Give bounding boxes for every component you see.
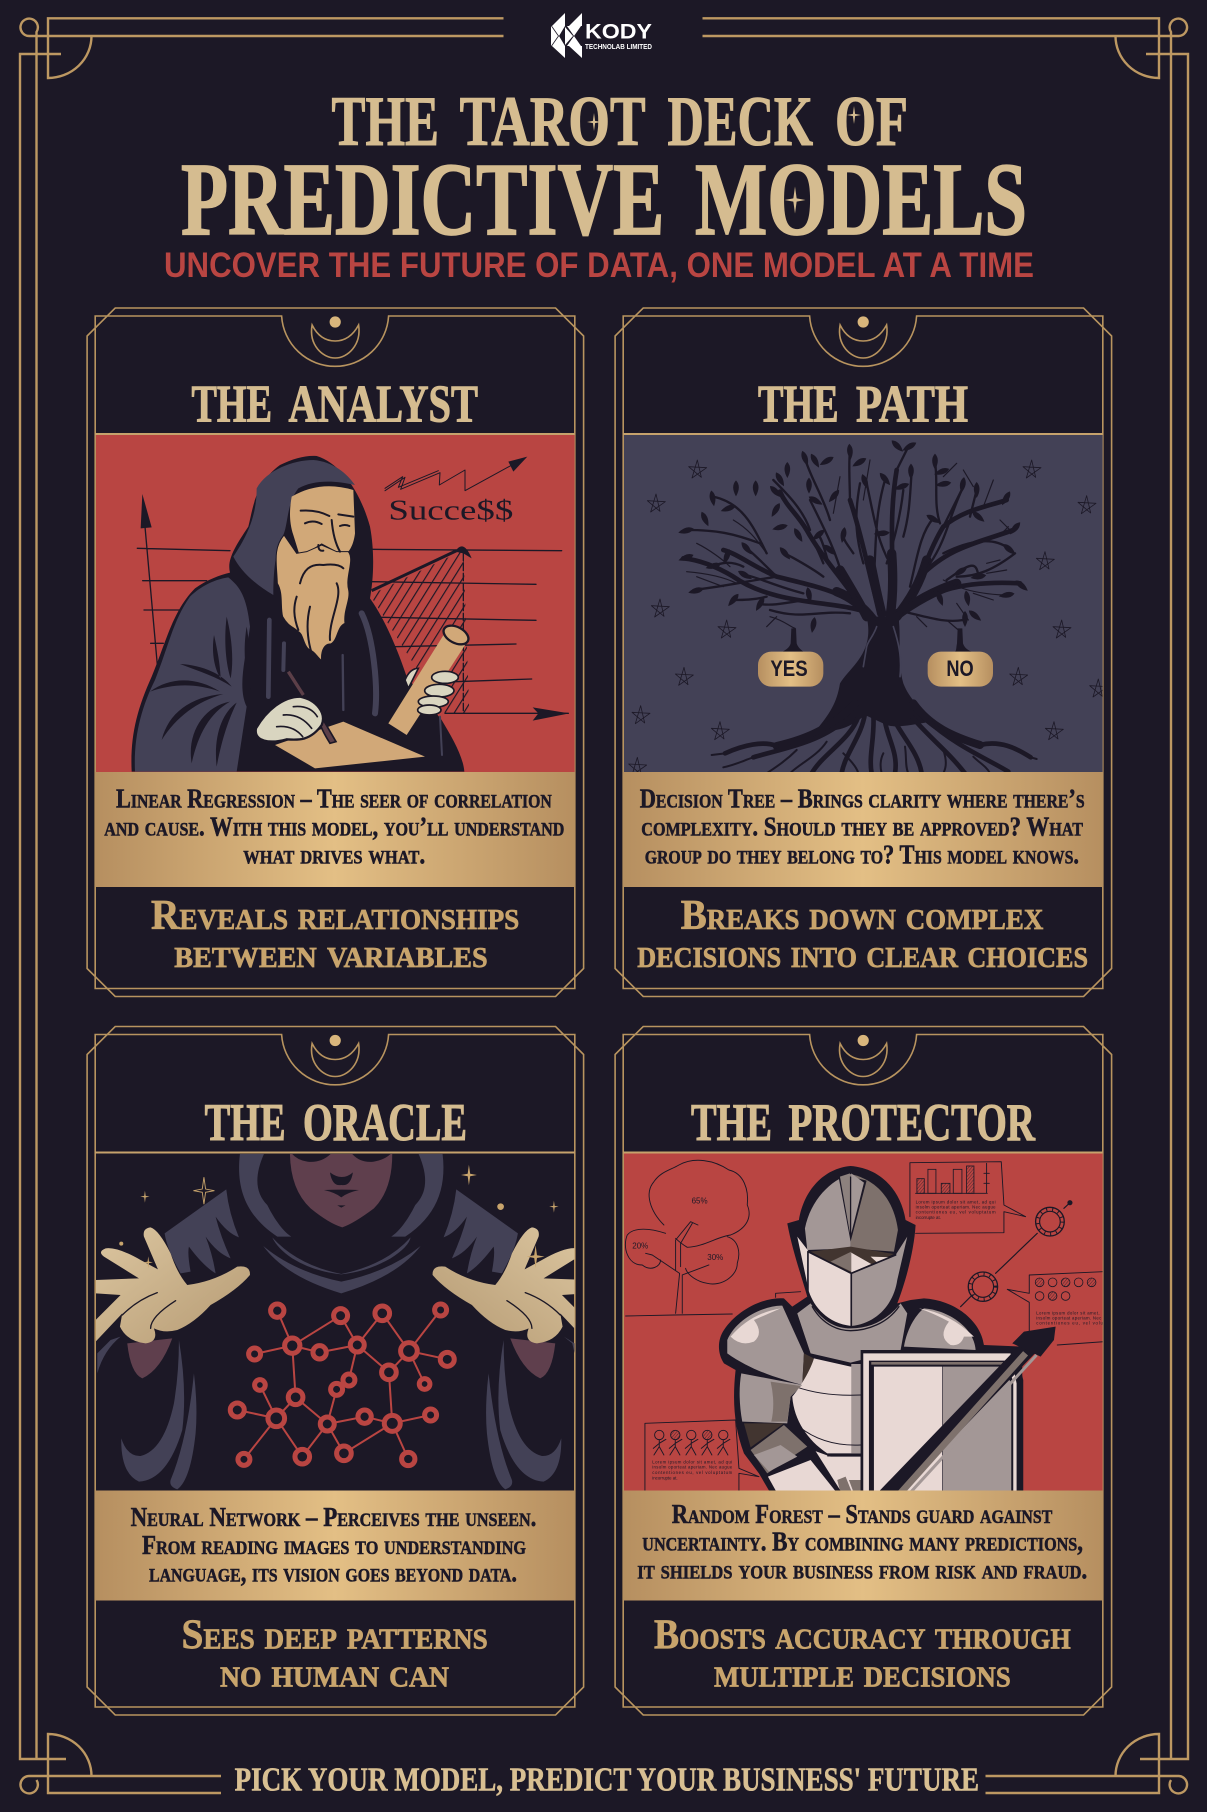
title line 1: TAROT <box>460 83 646 161</box>
doodle: circles note: Lorem ipsum dolor sit amet, <box>1036 1310 1100 1315</box>
panel: The Protector <box>615 1026 1112 1715</box>
panel: The Path <box>615 308 1112 996</box>
card frame <box>87 1026 584 1715</box>
title line 2: PREDICTIVE <box>181 142 664 257</box>
card heading: PATH <box>856 376 968 434</box>
card frame <box>615 308 1112 996</box>
doodle: people note: incorrupte at. <box>652 1475 678 1480</box>
title line 1: OF <box>835 83 908 161</box>
description band <box>95 1490 575 1600</box>
doodle: connected nodes <box>961 1201 1072 1307</box>
panel: The Analyst <box>87 308 584 996</box>
description band: language, its vision goes beyond data. <box>149 1558 517 1588</box>
description band: Random Forest – Stands guard against <box>672 1499 1053 1529</box>
tagline: between variables <box>174 931 488 977</box>
illustration: armoured knight <box>623 1153 1104 1500</box>
description band: it shields your business from risk and fraud. <box>637 1555 1087 1585</box>
title line 1 <box>332 83 908 161</box>
doodle: circles note: insolm oporteat aperiam. Nec <box>1036 1316 1102 1321</box>
card heading: ORACLE <box>303 1094 467 1152</box>
title line 2: MODELS <box>695 142 1027 257</box>
doodle: percentage tree: 20% <box>632 1242 648 1251</box>
doodle: bar chart note: Lorem ipsum dolor sit amet, ad qui <box>916 1199 996 1204</box>
doodle: circles note: contentiones eu, vel volu <box>1036 1321 1104 1326</box>
tagline: Sees deep patterns <box>182 1612 488 1658</box>
card heading <box>758 376 968 434</box>
card heading: ANALYST <box>288 376 478 434</box>
description band <box>623 772 1103 887</box>
description band: what drives what. <box>243 839 425 869</box>
illustration: monk with chart <box>95 435 576 773</box>
description band: Linear Regression – The seer of correlation <box>116 783 552 813</box>
doodle: bar chart note: contentiones eu, vel voluptatum <box>916 1210 996 1215</box>
logo: Kody Technolab: TECHNOLAB LIMITED <box>585 44 652 51</box>
card frame <box>87 308 584 996</box>
sword <box>882 1327 1056 1500</box>
illustration: decision tree <box>623 435 1108 775</box>
card frame <box>615 1026 1112 1715</box>
illustration: hooded oracle with neural network <box>96 1154 587 1489</box>
doodle: bar chart note: insolm oporteat aperiam. Nec augue <box>916 1205 996 1210</box>
card heading <box>691 1094 1036 1152</box>
doodle: circles note <box>1007 1272 1104 1345</box>
doodle: people note: contentiones eu, vel voluptatum <box>652 1470 733 1475</box>
doodle: percentage tree: 30% <box>707 1253 723 1262</box>
description band <box>95 772 575 887</box>
knight figure <box>719 1166 1056 1500</box>
tagline: Breaks down complex <box>681 893 1043 939</box>
description band <box>623 1490 1103 1600</box>
card heading <box>205 1094 467 1152</box>
description band: Neural Network – Perceives the unseen. <box>131 1502 536 1532</box>
sign: no: NO <box>946 656 974 681</box>
logo: Kody Technolab: KODY <box>585 20 652 43</box>
neural network <box>230 1304 454 1466</box>
sign: no <box>928 652 993 687</box>
description band: and cause. With this model, you’ll understand <box>104 811 564 841</box>
tagline: multiple decisions <box>714 1650 1011 1696</box>
card heading: THE <box>205 1094 286 1152</box>
doodle: people note <box>645 1292 801 1492</box>
tagline: Reveals relationships <box>151 893 519 939</box>
logo: Kody Technolab <box>551 13 652 58</box>
card heading: PROTECTOR <box>788 1094 1036 1152</box>
sign: yes: YES <box>770 656 808 681</box>
card heading: THE <box>691 1094 772 1152</box>
description band: uncertainty. By combining many predictions, <box>642 1527 1083 1557</box>
description band: Decision Tree – Brings clarity where there’s <box>640 783 1085 813</box>
tagline: decisions into clear choices <box>637 931 1088 977</box>
card heading: THE <box>192 376 272 434</box>
title line 1: DECK <box>668 83 813 161</box>
footer call to action: PICK YOUR MODEL, PREDICT YOUR BUSINESS' FUTURE <box>235 1762 979 1799</box>
doodle: people note: Lorem ipsum dolor sit amet, ad qui <box>652 1459 732 1464</box>
panel: The Oracle <box>87 1026 587 1715</box>
title stars <box>587 106 861 214</box>
tagline <box>182 1612 488 1696</box>
description band: complexity. Should they be approved? What <box>641 811 1083 841</box>
card heading: THE <box>758 376 839 434</box>
doodle: bar chart note: incorrupte at. <box>916 1215 941 1220</box>
doodle: percentage tree <box>625 1160 749 1316</box>
doodle: people note: insolm oporteat aperiam. Nec augue <box>652 1465 733 1470</box>
subtitle: UNCOVER THE FUTURE OF DATA, ONE MODEL AT A TIME <box>164 246 1034 285</box>
shield <box>861 1350 1023 1493</box>
doodle: bar chart note <box>910 1162 1026 1233</box>
tagline <box>151 893 519 977</box>
tagline: no human can <box>220 1650 449 1696</box>
label: success: Succe$$ <box>388 495 513 526</box>
description band: From reading images to understanding <box>142 1530 526 1560</box>
sign: yes <box>758 652 823 687</box>
tagline <box>654 1612 1071 1696</box>
doodle: percentage tree: 65% <box>692 1196 708 1205</box>
tagline: Boosts accuracy through <box>654 1612 1071 1658</box>
description band: group do they belong to? This model knows. <box>645 839 1079 869</box>
card heading <box>192 376 478 434</box>
title line 1: THE <box>332 83 439 161</box>
tagline <box>637 893 1088 977</box>
